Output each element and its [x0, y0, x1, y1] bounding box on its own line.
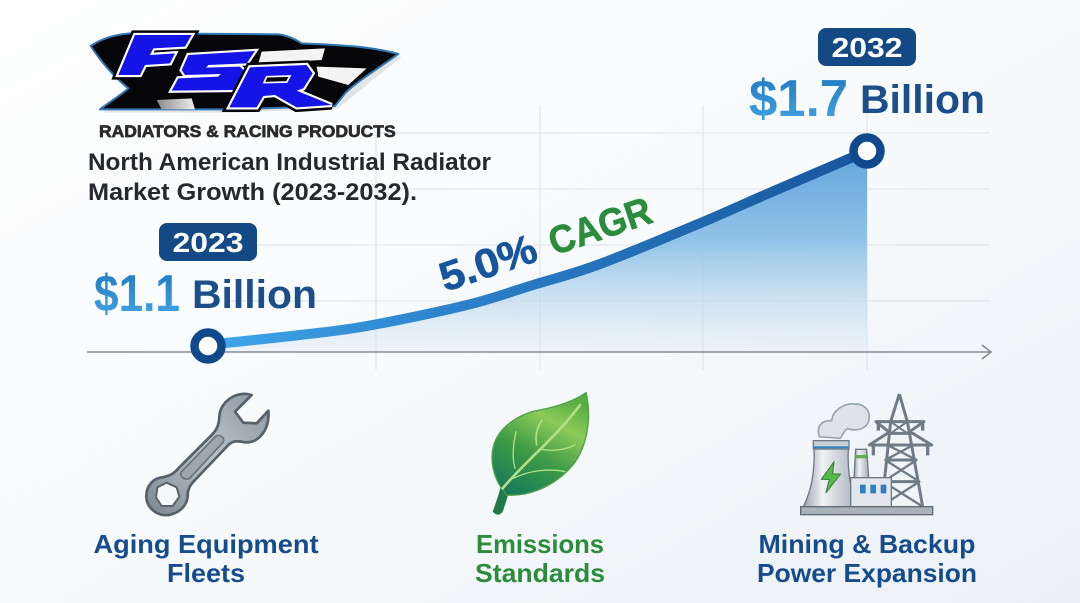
2023 value — [94, 265, 317, 323]
title — [88, 149, 491, 206]
label: aging equipment fleets: Fleets — [167, 558, 245, 588]
stack — [854, 449, 869, 478]
label: emissions standards: Emissions — [476, 529, 604, 559]
2023 value: Billion — [192, 273, 317, 317]
cooling tower — [803, 448, 858, 507]
2032 value: $1.7 — [749, 70, 848, 128]
CAGR label — [433, 187, 657, 301]
2032 badge: 2032 — [832, 32, 902, 63]
logo letter R — [229, 65, 332, 107]
start marker — [194, 332, 222, 360]
end marker — [854, 138, 880, 164]
logo: FSR Radiators & Racing Products — [91, 33, 402, 141]
icon: leaf — [492, 393, 588, 515]
icon: wrench — [146, 394, 268, 515]
logo letter F — [118, 35, 192, 75]
title: North American Industrial Radiator — [88, 149, 491, 176]
label: aging equipment fleets: Aging Equipment — [94, 529, 319, 559]
area under curve — [208, 151, 867, 352]
2032 value — [749, 70, 985, 128]
2023 badge: 2023 — [172, 227, 244, 258]
title: Market Growth (2023-2032). — [88, 179, 417, 206]
label: emissions standards — [475, 529, 605, 588]
growth chart — [87, 138, 991, 360]
label: emissions standards: Standards — [475, 558, 605, 588]
logo tagline: RADIATORS & RACING PRODUCTS — [99, 123, 396, 141]
2023 value: $1.1 — [94, 265, 180, 323]
factory block — [851, 478, 891, 507]
2032 badge — [818, 28, 916, 66]
pylon — [869, 394, 932, 507]
icon: power plant and pylon — [801, 394, 933, 515]
CAGR label: 5.0% — [433, 225, 543, 301]
2032 value: Billion — [860, 78, 985, 122]
logo letter S — [172, 51, 255, 91]
2032 value callout — [749, 28, 985, 128]
base — [801, 507, 933, 515]
growth curve — [208, 151, 867, 345]
label: mining and backup power expansion — [757, 529, 977, 588]
label: mining and backup power expansion: Mining & Backup — [758, 529, 976, 559]
lightning bolt — [821, 462, 841, 493]
CAGR label: CAGR — [543, 190, 657, 264]
2023 value callout — [94, 223, 317, 323]
2023 badge — [159, 223, 257, 261]
time axis arrow — [87, 345, 991, 359]
label: aging equipment fleets — [94, 529, 319, 588]
label: mining and backup power expansion: Power Expansion — [757, 558, 977, 588]
smoke cloud — [818, 404, 869, 438]
